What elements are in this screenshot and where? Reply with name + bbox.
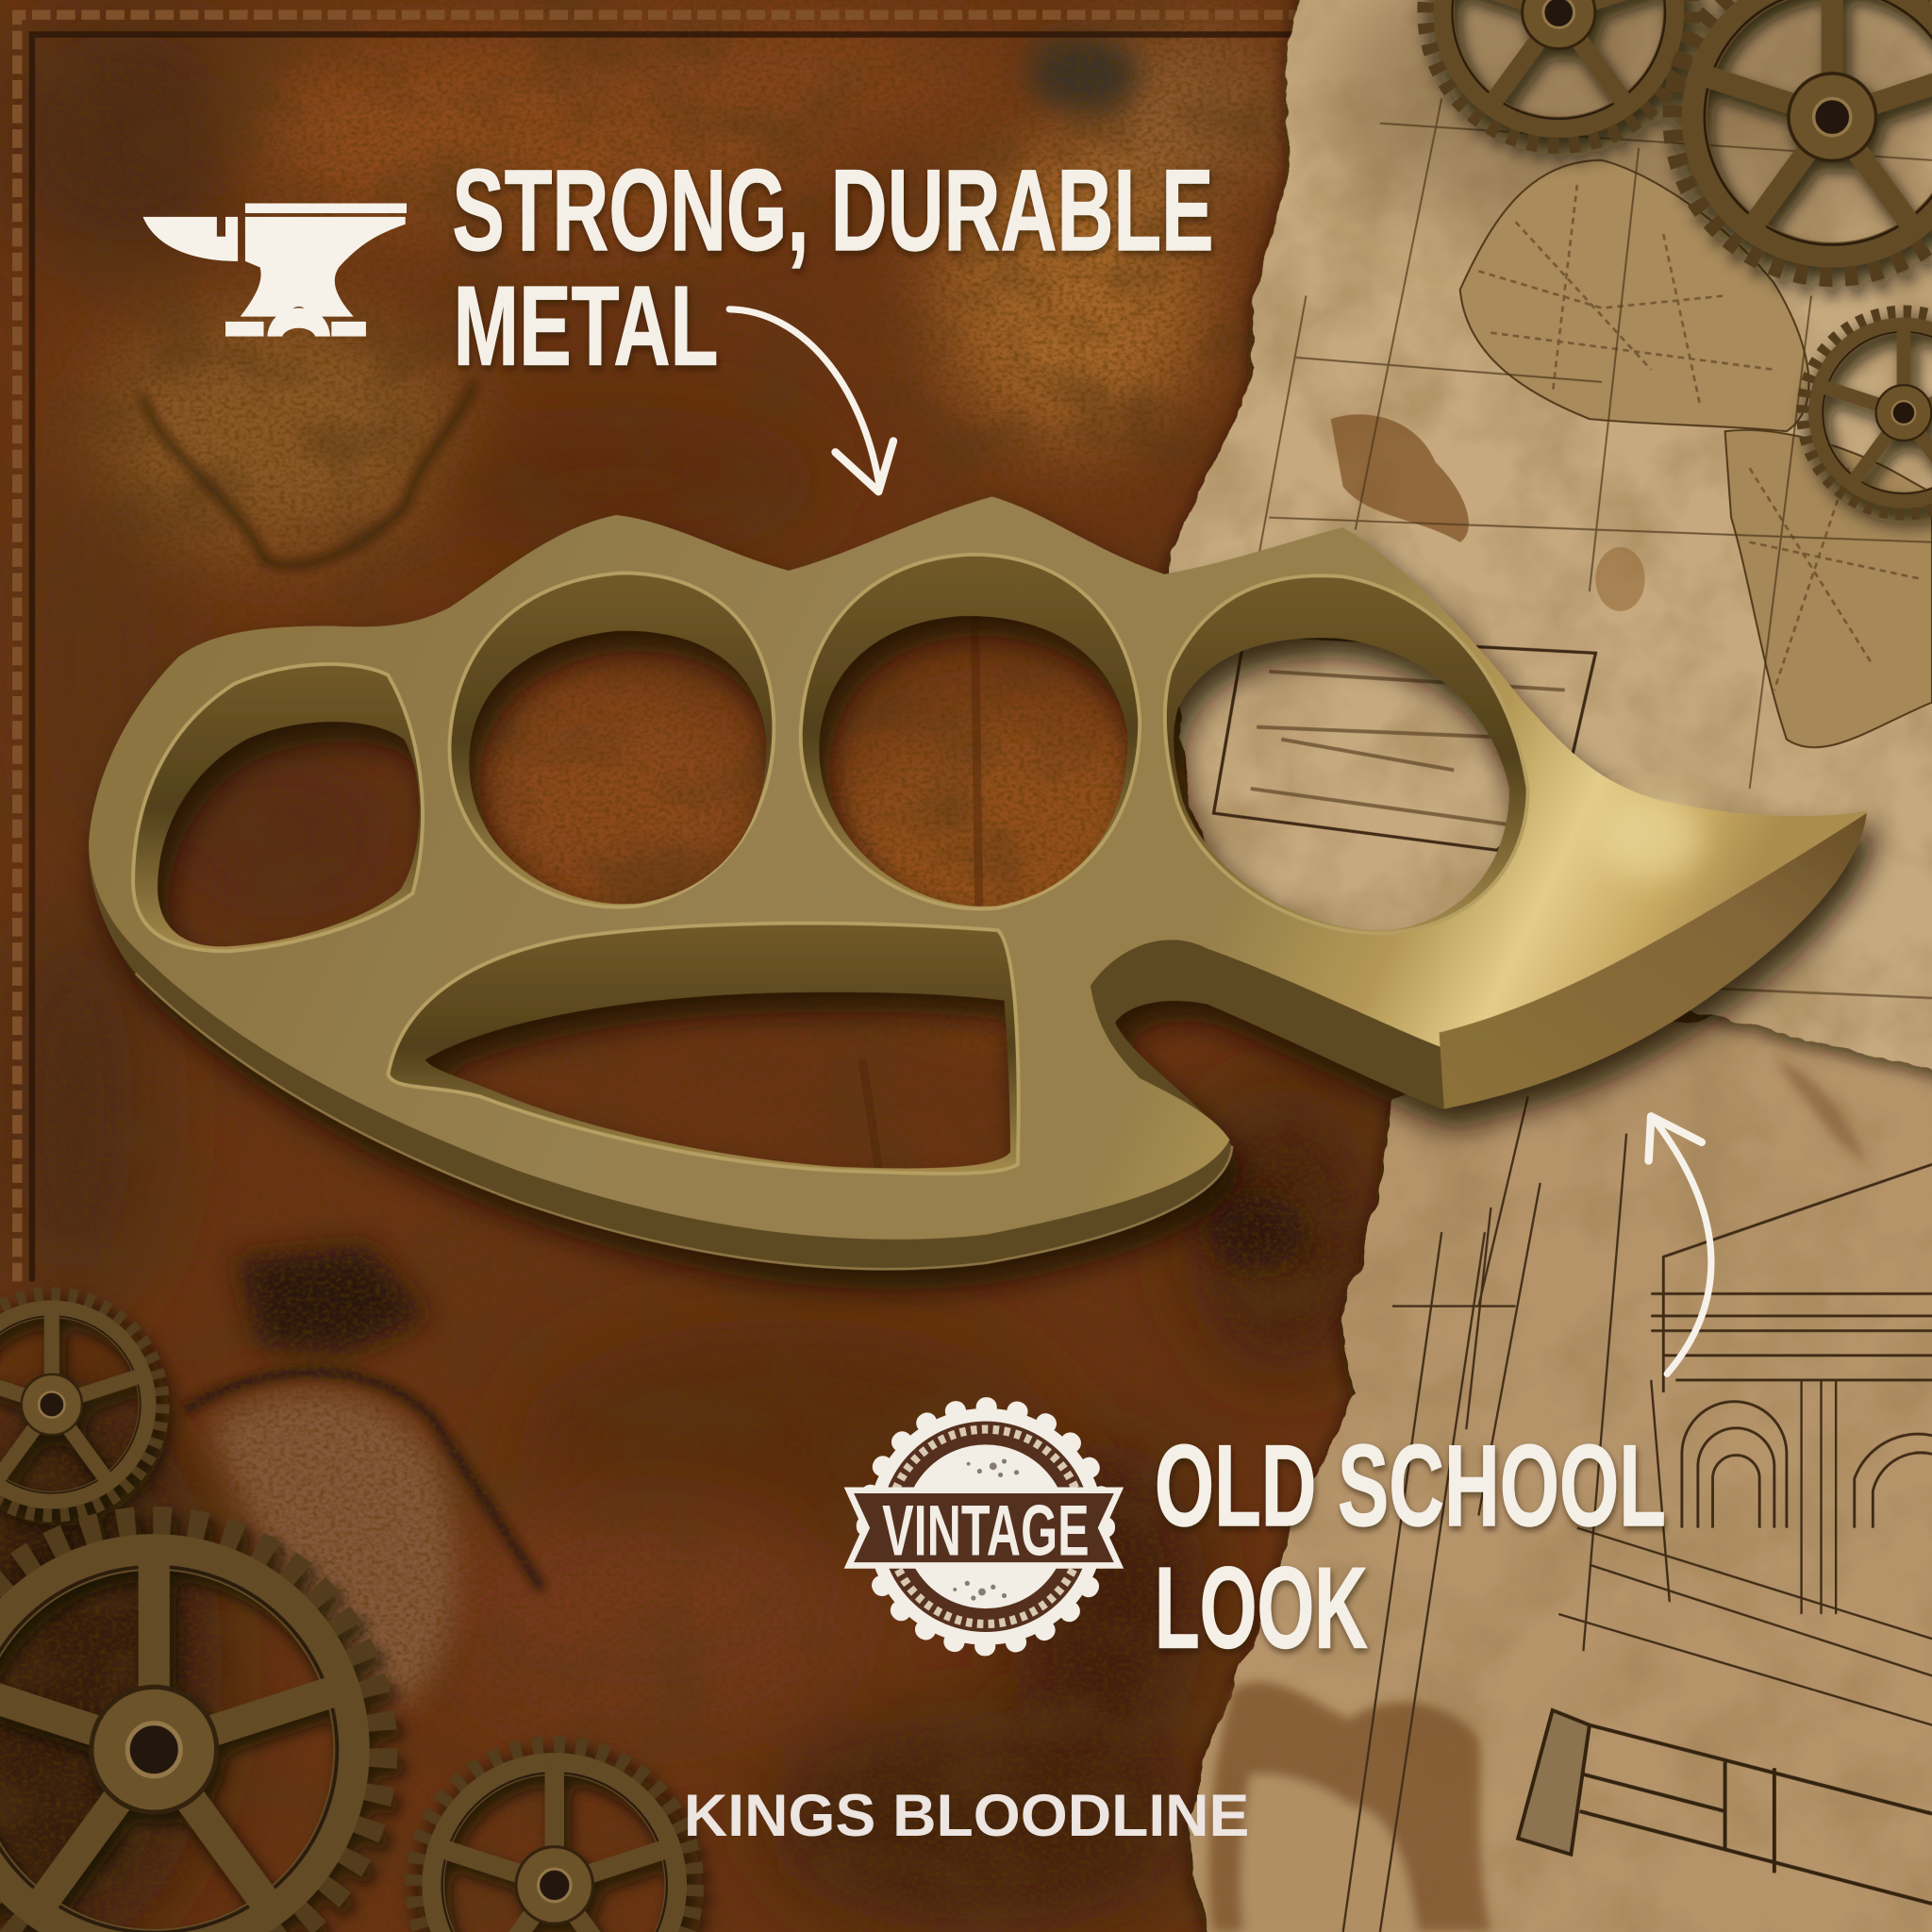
rim: grip slot bbox=[388, 924, 1019, 1174]
heading: old school look bbox=[1155, 1422, 1666, 1673]
icon: vintage badge: VINTAGE bbox=[882, 1491, 1090, 1571]
rim: fourth finger hole bbox=[1165, 575, 1528, 933]
heading: strong, durable metal: STRONG, DURABLE bbox=[452, 146, 1214, 275]
heading: old school look: OLD SCHOOL bbox=[1155, 1422, 1666, 1551]
rim: third finger hole bbox=[801, 555, 1140, 908]
arrow: points to knuckle from metal label bbox=[729, 309, 893, 491]
heading: strong, durable metal bbox=[452, 146, 1214, 390]
panel: upper map paper bbox=[1146, 0, 1932, 1084]
brass knuckle duster bbox=[89, 496, 1867, 1269]
map details bbox=[1214, 0, 1932, 998]
brand footer text: KINGS BLOODLINE bbox=[684, 1783, 1249, 1849]
rim: second finger hole bbox=[449, 573, 774, 908]
heading: old school look: LOOK bbox=[1155, 1543, 1368, 1673]
icon: anvil bbox=[143, 204, 407, 337]
icon: gears top right bbox=[1427, 0, 1932, 513]
rim: first finger hole bbox=[133, 664, 423, 951]
panel: lower blueprint paper bbox=[1171, 986, 1932, 1932]
heading: strong, durable metal: METAL bbox=[454, 263, 718, 390]
arrow: points to blade from old school label bbox=[1649, 1116, 1711, 1374]
blueprint drawing bbox=[1208, 1059, 1932, 1932]
icon: vintage badge bbox=[844, 1407, 1124, 1646]
blade bevel bbox=[1440, 813, 1867, 1109]
icon: gears bottom left bbox=[0, 1295, 693, 1932]
background: leather panel bbox=[0, 0, 1386, 1932]
